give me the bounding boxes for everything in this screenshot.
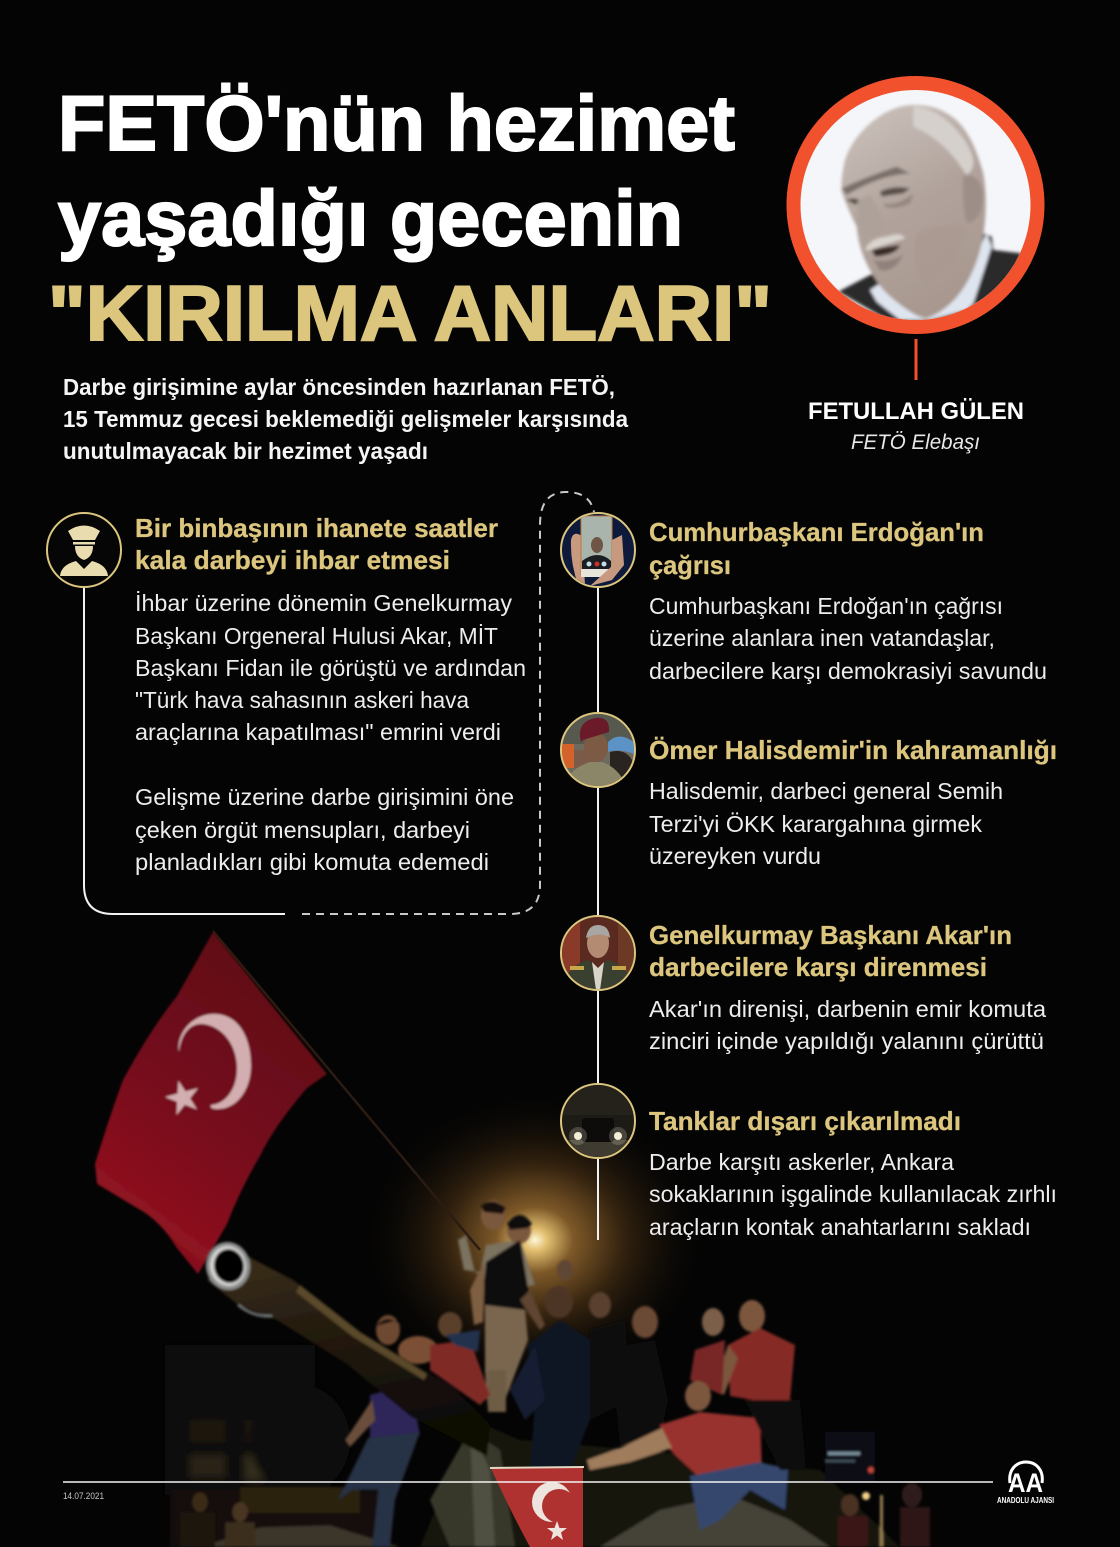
name caption [808, 398, 1024, 454]
panel: Ömer Halisdemir: üzereyken vurdu [649, 843, 821, 869]
people and tank [180, 1200, 930, 1547]
panel: tanks not taken out: araçların kontak anahtarlarını sakladı [649, 1214, 1031, 1240]
panel: whistleblower major: Başkanı Orgeneral Hulusi Akar, MİT [135, 623, 498, 649]
footer rule [63, 1481, 993, 1483]
panel: Erdoğan's call: darbecilere karşı demokrasiyi savundu [649, 658, 1047, 684]
logo: Anadolu Ajansı [997, 1462, 1054, 1505]
body text: Halisdemir, darbeci general Semih [649, 778, 1003, 804]
panel: whistleblower major: Başkanı Fidan ile görüştü ve ardından [135, 655, 526, 681]
distant city lights [825, 1432, 875, 1482]
panel: Erdoğan's call: çağrısı [649, 550, 731, 580]
panel: whistleblower major: araçlarına kapatılması" emrini verdi [135, 719, 501, 745]
name caption: FETULLAH GÜLEN [808, 398, 1024, 425]
flag pole [213, 931, 480, 1250]
heading: Cumhurbaşkanı Erdoğan'ın [649, 517, 984, 547]
panel: whistleblower major: çeken örgüt mensupları, darbeyi [135, 817, 470, 843]
name caption: FETÖ Elebaşı [851, 431, 980, 454]
panel: Akar's resistance: zinciri içinde yapıldığı yalanını çürüttü [649, 1028, 1044, 1054]
photo icon: phone call [561, 513, 635, 590]
title line 2: yaşadığı gecenin [58, 174, 683, 262]
orange ring [794, 83, 1038, 327]
panel: Akar's resistance: darbecilere karşı direnmesi [649, 952, 987, 982]
connector lines [84, 492, 598, 1240]
subtitle: 15 Temmuz gecesi beklemediği gelişmeler karşısında [63, 406, 628, 432]
panel: Erdoğan's call [561, 513, 1047, 684]
heading: Ömer Halisdemir'in kahramanlığı [649, 735, 1057, 765]
small Turkish flag [490, 1467, 584, 1547]
logo: Anadolu Ajansı: ANADOLU AJANSI [997, 1496, 1054, 1505]
body text: Darbe karşıtı askerler, Ankara [649, 1149, 954, 1175]
panel: Erdoğan's call: üzerine alanlara inen vatandaşlar, [649, 625, 995, 651]
tank barrel [207, 1256, 490, 1456]
body text: Akar'ın direnişi, darbenin emir komuta [649, 996, 1046, 1022]
panel: Akar's resistance [560, 915, 1046, 1054]
photo icon: soldier with beret [560, 713, 636, 790]
buildings and tree backdrop [165, 1345, 390, 1547]
panel: Ömer Halisdemir: Terzi'yi ÖKK karargahına girmek [649, 811, 982, 837]
man raising the flag pole [458, 1235, 535, 1290]
connector tick [914, 339, 918, 380]
title line 3: "KIRILMA ANLARI" [48, 269, 772, 357]
body text: Cumhurbaşkanı Erdoğan'ın çağrısı [649, 593, 1003, 619]
body text: İhbar üzerine dönemin Genelkurmay [135, 590, 512, 616]
man in blue shirt and jeans [376, 1315, 400, 1345]
panel: whistleblower major: "Türk hava sahasının askeri hava [135, 687, 469, 713]
bystanders [192, 1492, 208, 1512]
fence [240, 1487, 360, 1513]
heading: Tanklar dışarı çıkarılmadı [649, 1106, 961, 1136]
subtitle: Darbe girişimine aylar öncesinden hazırlanan FETÖ, [63, 374, 615, 400]
man in blue collar behind [438, 1312, 462, 1338]
man in red shirt leaning [398, 1336, 438, 1364]
large Turkish flag [95, 932, 327, 1274]
photo: citizens on a tank with Turkish flag [95, 931, 930, 1547]
subtitle [63, 374, 628, 464]
panel: whistleblower major: planladıkları gibi komuta edemedi [135, 849, 489, 875]
right side figure [841, 1494, 859, 1516]
man in black t-shirt [507, 1216, 531, 1244]
heading: Genelkurmay Başkanı Akar'ın [649, 920, 1012, 950]
muzzle [202, 1239, 254, 1293]
title line 1: FETÖ'nün hezimet [58, 79, 735, 167]
title [48, 79, 772, 357]
date: 14.07.2021 [63, 1491, 104, 1501]
man in red polo standing [739, 1300, 765, 1332]
panel: tanks not taken out: sokaklarının işgalinde kullanılacak zırhlı [649, 1181, 1057, 1207]
logo: Anadolu Ajansı: AA [1008, 1468, 1043, 1498]
panel: whistleblower major: kala darbeyi ihbar etmesi [135, 545, 450, 575]
panel: tanks not taken out [560, 1084, 1057, 1240]
crouching man in red polo [685, 1381, 711, 1411]
tarpaulin and tank body [420, 1425, 900, 1547]
portrait photo [838, 105, 1022, 323]
panel: whistleblower major [47, 513, 526, 875]
central crowd [545, 1286, 573, 1318]
panel: whistleblower major: Gelişme üzerine darbe girişimini öne [135, 784, 514, 810]
panel: Ömer Halisdemir [560, 713, 1057, 869]
icon: officer [47, 513, 121, 587]
heading: Bir binbaşının ihanete saatler [135, 513, 498, 543]
subtitle: unutulmayacak bir hezimet yaşadı [63, 438, 428, 464]
portrait: Fetullah Gülen [794, 83, 1038, 380]
street light glow [360, 1090, 710, 1390]
photo icon: general [560, 915, 638, 991]
photo icon: tank at night [560, 1084, 636, 1160]
